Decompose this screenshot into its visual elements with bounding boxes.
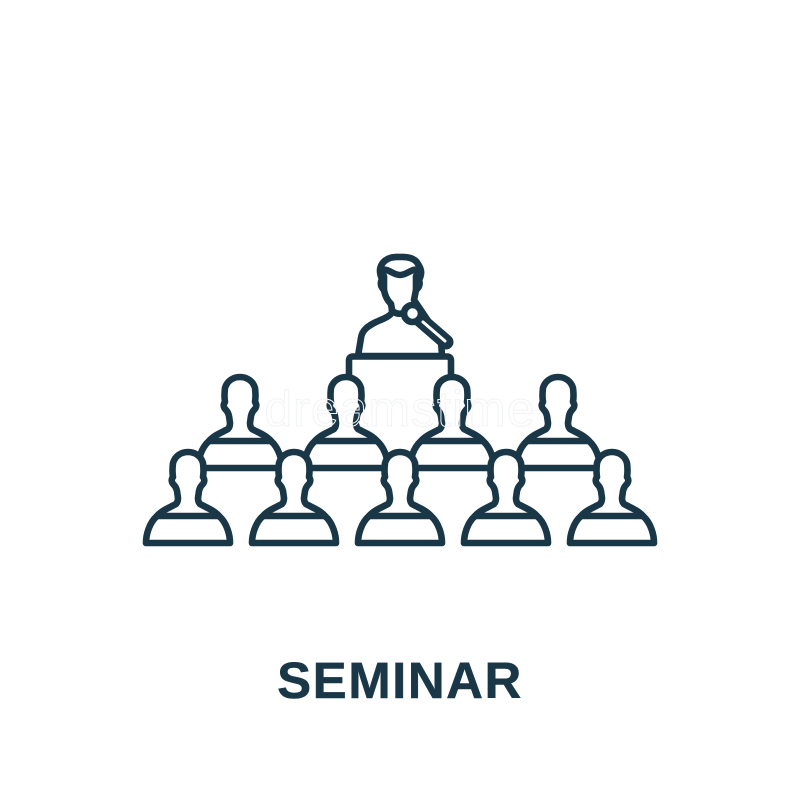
podium <box>349 356 451 450</box>
title: SEMINAR <box>277 652 523 709</box>
watermark: dreamstime <box>264 381 536 437</box>
icon: microphone <box>404 305 446 342</box>
person: front row 4 <box>464 452 548 543</box>
person: front row 3 <box>358 452 442 543</box>
person: back row 3 <box>410 377 494 468</box>
icon: seminar speaker and audience <box>146 257 654 543</box>
person: back row 2 <box>304 377 388 468</box>
person: back row 4 <box>516 377 600 468</box>
person: back row 1 <box>198 377 282 468</box>
person: front row 5 <box>570 452 654 543</box>
person: front row 1 <box>146 452 230 543</box>
person: front row 2 <box>252 452 336 543</box>
icon: speaker <box>358 257 446 356</box>
